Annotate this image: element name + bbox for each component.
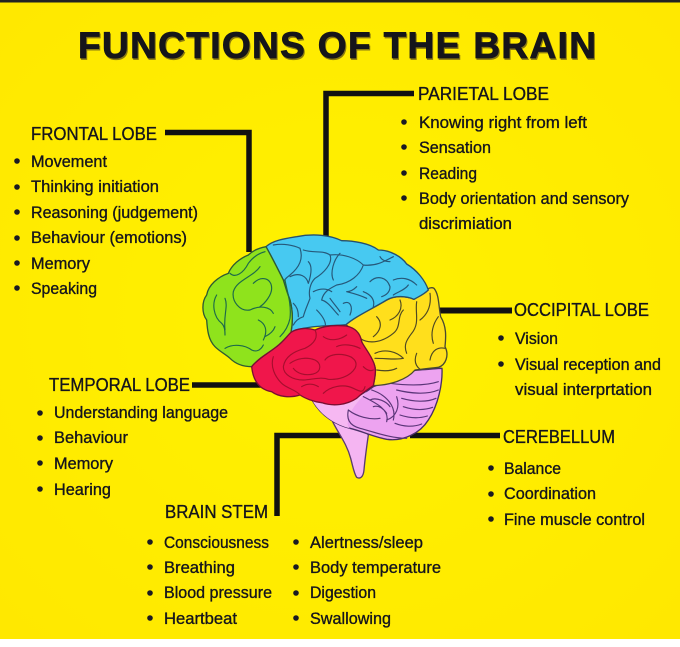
heading: parietal lobe: PARIETAL LOBE [418, 83, 549, 104]
list: frontal lobe functions: Behaviour (emotions) [31, 229, 187, 247]
list: cerebellum functions: Balance [504, 460, 561, 478]
list: temporal lobe functions: Memory [54, 455, 114, 473]
list: brain stem functions, right column [293, 534, 441, 628]
frontal lobe: green [203, 247, 292, 367]
panel: parietal lobe [401, 83, 630, 233]
panel: frontal lobe [14, 123, 198, 298]
list: frontal lobe functions: Thinking initiation [31, 178, 159, 196]
list: parietal lobe functions: Body orientation and sensory [419, 190, 630, 208]
list: temporal lobe functions: Hearing [54, 481, 111, 499]
heading: occipital lobe: OCCIPITAL LOBE [514, 299, 649, 320]
heading: brain stem: BRAIN STEM [165, 501, 268, 522]
panel: brain stem [147, 501, 441, 628]
temporal lobe: red [252, 326, 375, 405]
connector: parietal lobe [326, 94, 414, 238]
list: occipital lobe functions [498, 330, 661, 399]
list: parietal lobe functions: Sensation [419, 139, 491, 157]
panel: occipital lobe [498, 299, 661, 399]
list: parietal lobe functions: discrimiation [419, 215, 512, 233]
list: temporal lobe functions: Behaviour [54, 429, 128, 447]
list: cerebellum functions [488, 460, 645, 529]
list: cerebellum functions: Fine muscle control [504, 511, 645, 529]
connector: temporal lobe [192, 382, 262, 388]
heading: frontal lobe: FRONTAL LOBE [31, 123, 157, 144]
parietal lobe: blue [266, 235, 428, 332]
occipital lobe: yellow [346, 288, 447, 386]
list: occipital lobe functions: visual interprtation [515, 381, 652, 399]
list: parietal lobe functions: Knowing right from left [419, 114, 587, 132]
list: brain stem functions, left column: Breathing [164, 559, 235, 577]
connector: occipital lobe [440, 308, 512, 314]
panel: cerebellum [488, 426, 645, 529]
list: brain stem functions, left column: Blood pressure [164, 584, 272, 602]
list: frontal lobe functions: Movement [31, 153, 107, 171]
connector: frontal lobe [165, 132, 249, 252]
list: brain stem functions, left column: Heartbeat [164, 610, 237, 628]
list: frontal lobe functions: Speaking [31, 280, 97, 298]
list: parietal lobe functions [401, 114, 630, 233]
list: frontal lobe functions: Reasoning (judgement) [31, 204, 198, 222]
list: temporal lobe functions [37, 404, 228, 499]
list: occipital lobe functions: Visual reception and [515, 356, 661, 374]
title: FUNCTIONS OF THE BRAIN [79, 26, 597, 68]
list: brain stem functions, left column: Consciousness [164, 534, 269, 552]
brain illustration [203, 235, 447, 478]
list: brain stem functions, right column: Digestion [310, 584, 376, 602]
list: frontal lobe functions: Memory [31, 255, 91, 273]
list: cerebellum functions: Coordination [504, 485, 596, 503]
connector: brain stem and cerebellum [277, 436, 500, 516]
list: brain stem functions, left column [147, 534, 272, 628]
list: parietal lobe functions: Reading [419, 165, 477, 183]
title: FUNCTIONS OF THE BRAIN [78, 25, 596, 66]
list: occipital lobe functions: Vision [515, 330, 558, 348]
list: brain stem functions, right column: Body temperature [310, 559, 441, 577]
heading: cerebellum: CEREBELLUM [503, 426, 615, 447]
brain stem [333, 422, 368, 478]
list: brain stem functions, right column: Alertness/sleep [310, 534, 423, 552]
cerebellum [313, 368, 442, 440]
heading: temporal lobe: TEMPORAL LOBE [49, 374, 190, 395]
panel: temporal lobe [37, 374, 228, 499]
list: brain stem functions, right column: Swallowing [310, 610, 391, 628]
list: frontal lobe functions [14, 153, 198, 298]
list: temporal lobe functions: Understanding language [54, 404, 228, 422]
